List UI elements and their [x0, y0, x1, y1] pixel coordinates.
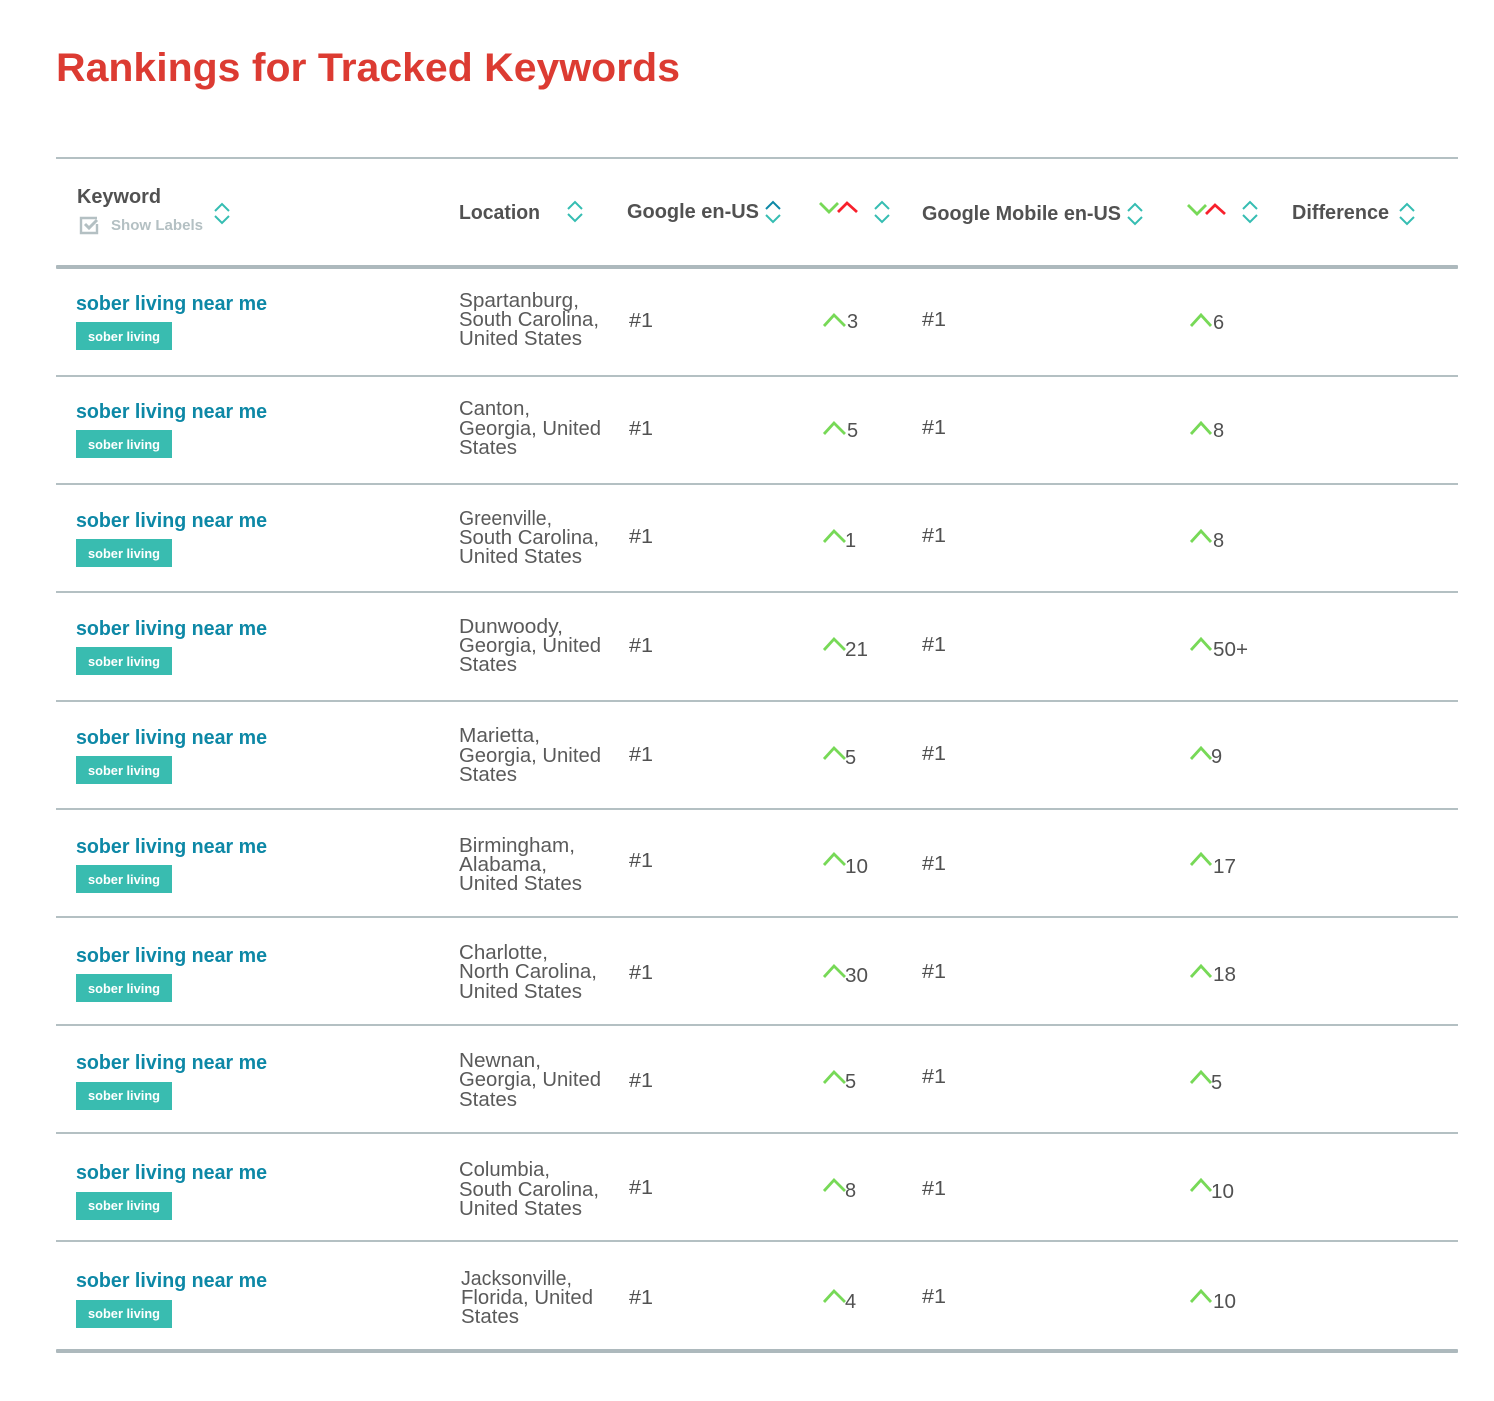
google rank: #1 [629, 1177, 653, 1199]
tag [76, 539, 172, 567]
google change: 4 [845, 1291, 856, 1313]
mobile rank: #1 [922, 853, 946, 875]
google rank: #1 [629, 962, 653, 984]
location: Georgia, United [459, 745, 601, 767]
location [459, 290, 599, 350]
location: Birmingham, [459, 835, 575, 857]
keyword: sober living near me [76, 727, 267, 749]
tag: sober living [88, 1088, 160, 1103]
keyword: sober living near me [76, 945, 267, 967]
google change [824, 311, 858, 333]
google change [824, 1180, 856, 1202]
sort icon: mobile [1128, 204, 1142, 224]
location: United States [459, 873, 582, 895]
show labels text: Show Labels [111, 217, 203, 234]
keyword: sober living near me [76, 510, 267, 532]
google change: 5 [845, 747, 856, 769]
tag: sober living [88, 981, 160, 996]
row: Spartanburg [76, 290, 1224, 350]
google change: 1 [845, 530, 856, 552]
tag: sober living [88, 546, 160, 561]
row: Columbia [76, 1159, 1234, 1220]
keyword: sober living near me [76, 401, 267, 423]
tag: sober living [88, 1198, 160, 1213]
mobile rank: #1 [922, 961, 946, 983]
header: location: Location [459, 202, 540, 224]
location: United States [459, 981, 582, 1003]
location: Canton, [459, 398, 530, 420]
location: Dunwoody, [459, 616, 563, 638]
sort icon: google change [875, 202, 889, 222]
sort icon: mobile change [1243, 202, 1257, 222]
tag [76, 865, 172, 893]
mobile change: 8 [1213, 420, 1224, 442]
location: South Carolina, [459, 309, 599, 331]
location: South Carolina, [459, 1179, 599, 1201]
mobile change: 10 [1211, 1181, 1234, 1203]
row: Greenville [76, 508, 1224, 568]
location: Alabama, [459, 854, 547, 876]
google change: 8 [845, 1180, 856, 1202]
google change: 21 [845, 639, 868, 661]
location: Columbia, [459, 1159, 550, 1181]
google change [824, 530, 856, 552]
google change [824, 1291, 856, 1313]
up/down icon: mobile [1188, 205, 1225, 214]
table header [77, 186, 1414, 234]
tag [76, 1300, 172, 1328]
google rank: #1 [629, 418, 653, 440]
tag [76, 430, 172, 458]
mobile change: 18 [1213, 964, 1236, 986]
keyword: sober living near me [76, 1270, 267, 1292]
mobile change [1191, 964, 1236, 986]
location: Charlotte, [459, 942, 548, 964]
google rank: #1 [629, 310, 653, 332]
google change [824, 854, 868, 878]
mobile change [1191, 530, 1224, 552]
location: Jacksonville, [461, 1268, 572, 1290]
location: Georgia, United [459, 635, 601, 657]
tag [76, 647, 172, 675]
location [459, 398, 601, 459]
location: North Carolina, [459, 961, 597, 983]
google change: 30 [845, 965, 868, 987]
mobile rank: #1 [922, 1178, 946, 1200]
tag [76, 974, 172, 1002]
keyword: sober living near me [76, 293, 267, 315]
tag: sober living [88, 329, 160, 344]
mobile rank: #1 [922, 1286, 946, 1308]
row: Newnan [76, 1050, 1222, 1111]
up/down icon: google [820, 203, 857, 212]
location: United States [459, 546, 582, 568]
location [459, 1050, 601, 1111]
mobile change: 50+ [1213, 639, 1248, 661]
location: Spartanburg, [459, 290, 579, 312]
mobile change: 6 [1213, 312, 1224, 334]
location [459, 835, 582, 895]
mobile change [1191, 854, 1236, 878]
sort icon: location [568, 202, 582, 221]
mobile rank: #1 [922, 1066, 946, 1088]
google change [824, 420, 858, 442]
location [461, 1268, 593, 1328]
location: Georgia, United [459, 1069, 601, 1091]
location: States [461, 1306, 519, 1328]
tag [76, 322, 172, 350]
location: Newnan, [459, 1050, 541, 1072]
keyword: sober living near me [76, 836, 267, 858]
location: United States [459, 328, 582, 350]
google change [824, 965, 868, 987]
keyword: sober living near me [76, 618, 267, 640]
mobile change [1191, 420, 1224, 442]
tag: sober living [88, 872, 160, 887]
google change: 5 [845, 1071, 856, 1093]
keyword: sober living near me [76, 1052, 267, 1074]
tag: sober living [88, 654, 160, 669]
tag: sober living [88, 763, 160, 778]
mobile change [1191, 639, 1248, 661]
mobile change: 5 [1211, 1072, 1222, 1094]
row: Birmingham [76, 835, 1236, 895]
location: South Carolina, [459, 527, 599, 549]
sort icon: google en-us [766, 202, 780, 222]
header: keyword: Keyword [77, 186, 161, 208]
google rank: #1 [629, 744, 653, 766]
row: Marietta [76, 725, 1222, 786]
location [459, 508, 599, 568]
location [459, 942, 597, 1003]
mobile change [1191, 312, 1224, 334]
tag [76, 1082, 172, 1110]
tag [76, 1192, 172, 1220]
mobile change [1191, 1072, 1222, 1094]
tag: sober living [88, 1306, 160, 1321]
mobile rank: #1 [922, 634, 946, 656]
location: Marietta, [459, 725, 540, 747]
location [459, 1159, 599, 1220]
google change: 5 [847, 420, 858, 442]
row: Charlotte [76, 942, 1236, 1003]
google rank: #1 [629, 635, 653, 657]
location: States [459, 437, 517, 459]
location: States [459, 1089, 517, 1111]
header: google en-us: Google en-US [627, 201, 759, 223]
location: United States [459, 1198, 582, 1220]
google rank: #1 [629, 526, 653, 548]
location: States [459, 764, 517, 786]
location: Greenville, [459, 508, 552, 530]
mobile rank: #1 [922, 525, 946, 547]
keyword: sober living near me [76, 1162, 267, 1184]
row: Dunwoody [76, 616, 1248, 676]
location: Georgia, United [459, 418, 601, 440]
row: Jacksonville [76, 1268, 1236, 1328]
location: States [459, 654, 517, 676]
sort icon: keyword [215, 204, 229, 223]
google change: 3 [847, 311, 858, 333]
mobile change [1191, 1291, 1236, 1313]
mobile change: 9 [1211, 746, 1222, 768]
google change [824, 639, 868, 661]
header: difference: Difference [1292, 202, 1389, 224]
mobile change [1191, 746, 1222, 768]
mobile change [1191, 1180, 1234, 1203]
row: Canton [76, 398, 1224, 459]
tag: sober living [88, 437, 160, 452]
tag [76, 756, 172, 784]
title: Rankings for Tracked Keywords [56, 46, 680, 90]
mobile rank: #1 [922, 309, 946, 331]
google rank: #1 [629, 1287, 653, 1309]
location [459, 616, 601, 676]
sort icon: difference [1400, 204, 1414, 224]
google change [824, 747, 856, 769]
header: google mobile en-us: Google Mobile en-US [922, 203, 1121, 225]
mobile change: 8 [1213, 530, 1224, 552]
mobile change: 10 [1213, 1291, 1236, 1313]
location [459, 725, 601, 786]
google change: 10 [845, 856, 868, 878]
show labels checkbox icon [81, 218, 97, 233]
location: Florida, United [461, 1287, 593, 1309]
google rank: #1 [629, 1070, 653, 1092]
mobile rank: #1 [922, 743, 946, 765]
mobile rank: #1 [922, 417, 946, 439]
google change [824, 1071, 856, 1093]
google rank: #1 [629, 850, 653, 872]
mobile change: 17 [1213, 856, 1236, 878]
